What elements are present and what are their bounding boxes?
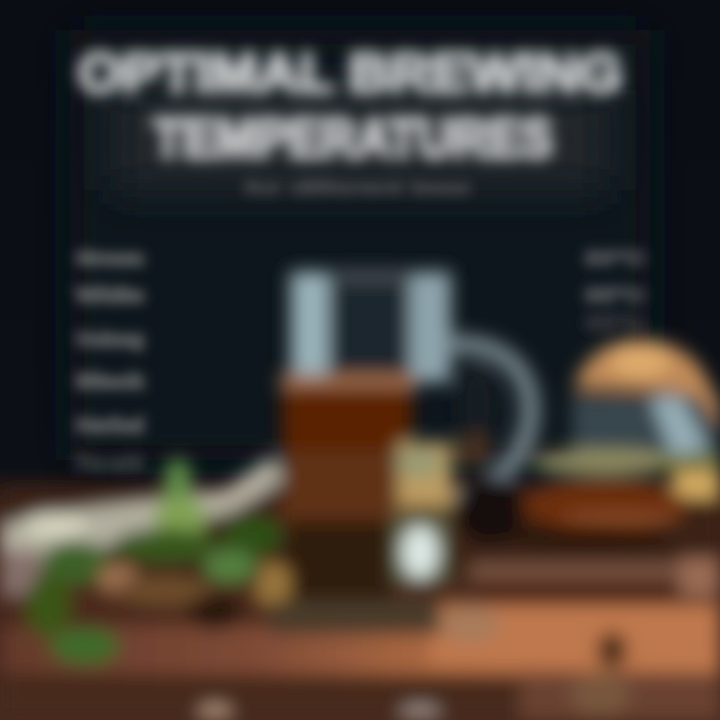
glass mug of tea xyxy=(270,268,500,643)
background centre glow xyxy=(70,30,650,460)
title haze xyxy=(110,90,610,190)
scene wrapper xyxy=(0,268,720,720)
white cloth behind herbs xyxy=(0,455,285,595)
left temperature list: White xyxy=(76,285,144,307)
title: TEMPERATURES xyxy=(153,106,553,169)
spices on table xyxy=(98,560,296,630)
title: OPTIMAL BREWING xyxy=(78,41,623,104)
title xyxy=(78,41,623,169)
mug handle xyxy=(450,344,530,500)
left temperature list: Black xyxy=(76,371,145,393)
subtitle: for different teas xyxy=(245,178,470,197)
wooden table xyxy=(0,490,720,720)
left temperature list: Herbal xyxy=(76,415,144,437)
right temperature list xyxy=(585,248,645,335)
right temperature list: 95°C xyxy=(585,313,645,335)
left temperature list: Pu-erh xyxy=(76,453,144,475)
left temperature list xyxy=(76,248,145,475)
right temperature list: 80°C xyxy=(585,248,645,270)
teapot and plate xyxy=(456,339,720,597)
left temperature list: Green xyxy=(76,248,144,270)
left temperature list: Oolong xyxy=(76,329,144,351)
green herb sprig xyxy=(26,458,282,664)
right temperature list: 85°C xyxy=(585,285,645,307)
